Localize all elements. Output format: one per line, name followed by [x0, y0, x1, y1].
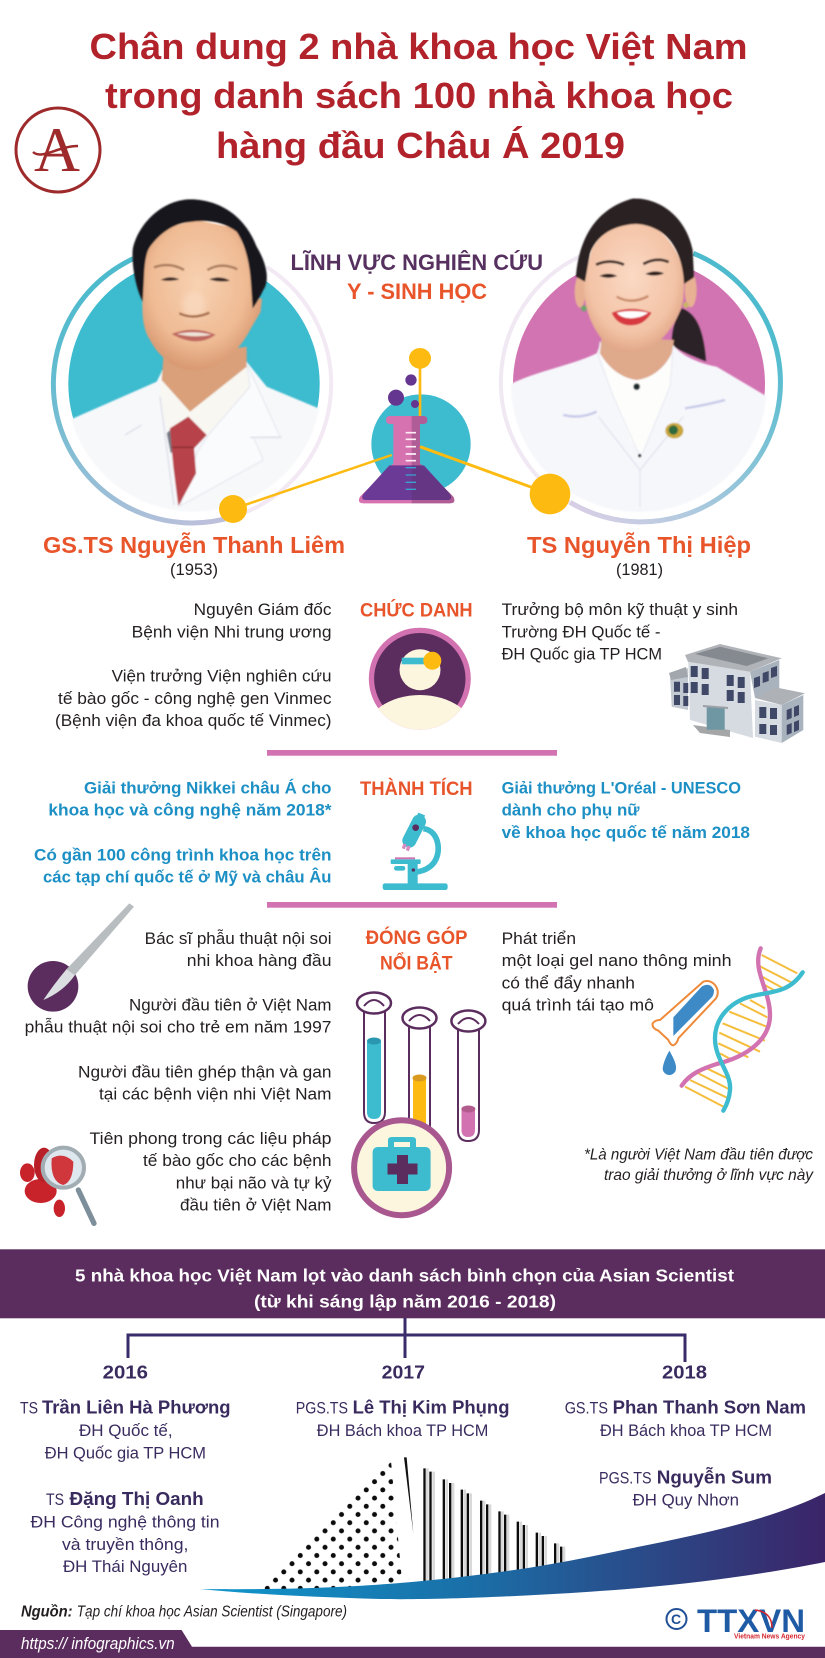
text: left titles: (Bệnh viện đa khoa quốc tế Vinmec) [55, 711, 332, 730]
column: 2017 [296, 1362, 510, 1440]
logo: TTXVN: Vietnam News Agency [734, 1632, 806, 1640]
icon: A logo: A [34, 114, 80, 185]
column: 2018: ĐH Quy Nhơn [633, 1490, 739, 1509]
divider 2 [267, 902, 557, 908]
icon: medical kit [354, 1120, 449, 1215]
heading: đóng góp nổi bật: ĐÓNG GÓP [366, 927, 468, 949]
text: left titles: tế bào gốc - công nghệ gen Vinmec [58, 689, 332, 708]
text: right contributions: quá trình tái tạo mô [502, 996, 654, 1015]
column: 2016: và truyền thông, [62, 1535, 188, 1554]
text: left achievements: Có gần 100 công trình khoa học trên [34, 845, 332, 864]
source: Nguồn: [21, 1604, 73, 1621]
column: 2016: TS [46, 1490, 64, 1509]
title: trong danh sách 100 nhà khoa học [105, 75, 733, 116]
logo: TTXVN: TTXVN [697, 1603, 805, 1639]
icon: doctor [368, 628, 471, 730]
text: right titles: Trưởng bộ môn kỹ thuật y sinh [502, 600, 738, 619]
heading: research field: Y - SINH HỌC [347, 279, 487, 304]
column: 2016: ĐH Quốc gia TP HCM [45, 1443, 206, 1462]
text: right achievements [502, 778, 750, 842]
text: right contributions: một loại gel nano thông minh [502, 951, 732, 970]
text: left achievements: khoa học và công nghệ năm 2018* [48, 801, 332, 820]
name: left scientist: GS.TS Nguyễn Thanh Liêm [43, 531, 345, 558]
column: 2017: ĐH Bách khoa TP HCM [317, 1421, 488, 1440]
banner: (từ khi sáng lập năm 2016 - 2018) [254, 1291, 556, 1311]
column: 2018: 2018 [662, 1362, 707, 1382]
text: left contributions: đầu tiên ở Việt Nam [180, 1196, 332, 1215]
divider 1 [267, 750, 557, 756]
heading: research field [290, 250, 543, 304]
heading: đóng góp nổi bật: NỔI BẬT [380, 952, 453, 974]
column: 2018: Phan Thanh Sơn Nam [613, 1397, 806, 1417]
column: 2017: Lê Thị Kim Phụng [353, 1397, 510, 1417]
icon: test tubes [357, 992, 485, 1141]
column: 2016: TS [20, 1398, 38, 1417]
source: Tạp chí khoa học Asian Scientist (Singapore) [77, 1604, 347, 1621]
title: hàng đầu Châu Á 2019 [216, 125, 625, 166]
name: left scientist [43, 531, 345, 579]
text: left titles: Nguyên Giám đốc [194, 600, 332, 619]
column: 2016: Trần Liên Hà Phương [42, 1397, 230, 1417]
icon: dropper and DNA [653, 948, 803, 1111]
text: left contributions: Bác sĩ phẫu thuật nội soi [145, 929, 332, 948]
text: left contributions: tại các bệnh viện nhi Việt Nam [99, 1084, 332, 1103]
text: left contributions: phẫu thuật nội soi cho trẻ em năm 1997 [25, 1018, 331, 1037]
heading: thành tích: THÀNH TÍCH [360, 778, 473, 800]
title: Chân dung 2 nhà khoa học Việt Nam [90, 26, 748, 67]
text: right achievements: Giải thưởng L'Oréal - UNESCO [502, 778, 741, 797]
column: 2016: 2016 [103, 1362, 148, 1382]
text: left achievements: các tạp chí quốc tế ở Mỹ và châu Âu [43, 868, 332, 887]
icon: A logo [16, 108, 100, 192]
text: right achievements: dành cho phụ nữ [502, 801, 640, 820]
timeline connector [128, 1318, 685, 1362]
text: right contributions: có thể đẩy nhanh [502, 973, 635, 992]
text: left titles: Bệnh viện Nhi trung ương [132, 622, 332, 641]
column: 2018 [565, 1362, 806, 1509]
column: 2018: GS.TS [565, 1398, 608, 1417]
chart: rising mountains [200, 1457, 825, 1599]
text: left achievements [34, 778, 332, 887]
name: left scientist: (1953) [170, 560, 218, 579]
name: right scientist: (1981) [616, 560, 663, 579]
heading: research field: LĨNH VỰC NGHIÊN CỨU [290, 250, 543, 275]
portrait: GS.TS Nguyễn Thanh Liêm [53, 199, 331, 523]
icon: building [669, 644, 805, 743]
icon: scalpel [28, 903, 134, 1012]
footnote [584, 1146, 814, 1184]
banner: 5 nhà khoa học Việt Nam lọt vào danh sách bình chọn của Asian Scientist [75, 1266, 734, 1286]
heading: chức danh: CHỨC DANH [360, 600, 473, 622]
text: right contributions [502, 929, 732, 1015]
column: 2017: PGS.TS [296, 1398, 348, 1417]
heading: đóng góp nổi bật [366, 927, 468, 974]
text: left contributions: Người đầu tiên ghép thận và gan [78, 1062, 332, 1081]
column: 2018: PGS.TS [599, 1468, 652, 1487]
name: right scientist [527, 531, 751, 579]
column: 2016: Đặng Thị Oanh [70, 1489, 204, 1509]
footer [0, 1630, 825, 1658]
column: 2018: ĐH Bách khoa TP HCM [600, 1421, 772, 1440]
text: right achievements: về khoa học quốc tế năm 2018 [502, 823, 750, 842]
column: 2016 [20, 1362, 230, 1576]
column: 2016: ĐH Quốc tế, [79, 1421, 173, 1440]
icon: blood cells and magnifier [20, 1148, 94, 1223]
text: right titles [502, 600, 738, 663]
column: 2018: Nguyễn Sum [657, 1466, 772, 1487]
footnote: trao giải thưởng ở lĩnh vực này [604, 1167, 814, 1184]
text: left contributions: Người đầu tiên ở Việt Nam [129, 996, 332, 1015]
text: left achievements: Giải thưởng Nikkei châu Á cho [84, 778, 332, 797]
text: left contributions: Tiên phong trong các liệu pháp [90, 1129, 332, 1148]
footer: https:// infographics.vn [21, 1635, 175, 1653]
text: left contributions [25, 929, 332, 1215]
column: 2016: ĐH Công nghệ thông tin [30, 1513, 220, 1532]
text: left contributions: như bại não và tự kỷ [176, 1173, 332, 1192]
text: right titles: Trường ĐH Quốc tế - [502, 622, 660, 641]
logo: TTXVN: C [671, 1611, 681, 1627]
title [90, 26, 748, 166]
column: 2017: 2017 [382, 1362, 425, 1382]
footnote: *Là người Việt Nam đầu tiên được [584, 1146, 813, 1163]
name: right scientist: TS Nguyễn Thị Hiệp [527, 531, 751, 558]
text: right titles: ĐH Quốc gia TP HCM [502, 644, 662, 663]
text: left contributions: tế bào gốc cho các bệnh [143, 1151, 332, 1170]
portrait: TS Nguyễn Thị Hiệp [501, 198, 780, 522]
banner [0, 1249, 825, 1318]
icon: flask with connectors [219, 348, 570, 523]
text: left titles [55, 600, 332, 730]
icon: microscope [383, 814, 448, 890]
text: left titles: Viện trưởng Viện nghiên cứu [112, 667, 331, 686]
column: 2016: ĐH Thái Nguyên [63, 1557, 187, 1576]
text: right contributions: Phát triển [502, 929, 576, 948]
text: left contributions: nhi khoa hàng đầu [187, 951, 332, 970]
